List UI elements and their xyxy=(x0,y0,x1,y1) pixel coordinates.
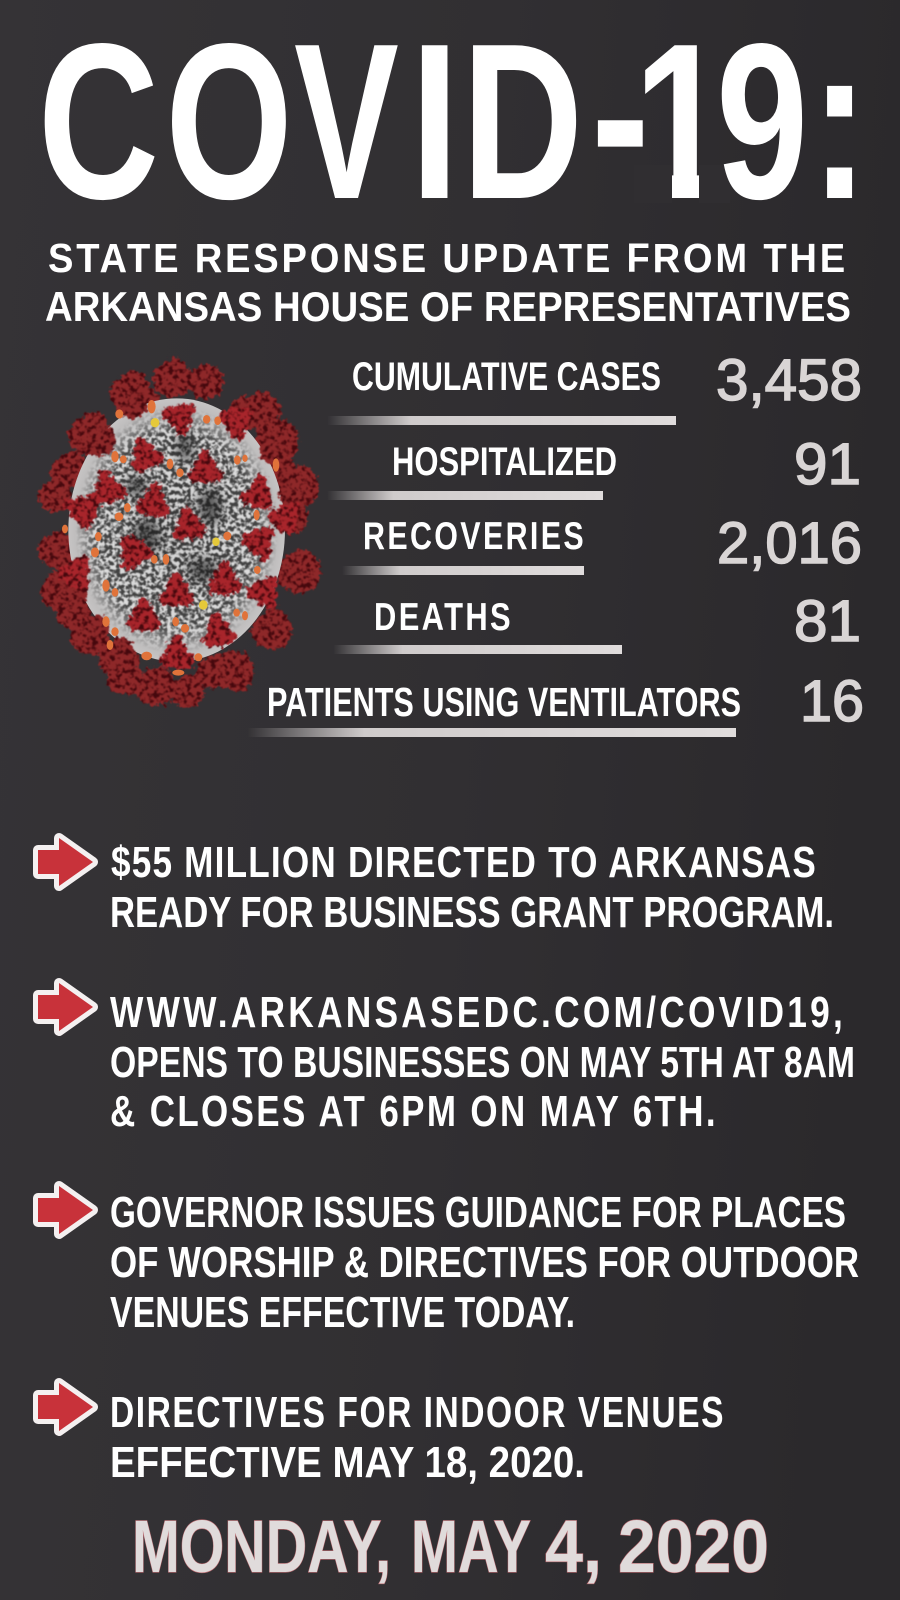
stat: cumulative cases xyxy=(327,348,862,425)
stat: recoveries xyxy=(342,511,862,576)
stat: patients using ventilators: 16 xyxy=(800,669,864,734)
stat: cumulative cases: 3,458 xyxy=(716,348,862,413)
stat: deaths: DEATHS xyxy=(374,596,513,639)
stat: hospitalized xyxy=(327,432,861,500)
title: D xyxy=(462,0,583,245)
date: MONDAY, xyxy=(132,1505,391,1588)
bullet: grant program xyxy=(110,838,834,937)
stat: patients using ventilators xyxy=(247,669,864,737)
title: O xyxy=(165,0,293,246)
title: : xyxy=(810,0,869,245)
icon: arrow 3 xyxy=(38,1186,93,1234)
stat: hospitalized: 91 xyxy=(794,432,861,497)
stat: deaths xyxy=(333,589,861,654)
bullet: worship guidance xyxy=(110,1188,859,1337)
date: 2020 xyxy=(618,1505,769,1588)
title: 1 xyxy=(634,0,729,245)
title: 9 xyxy=(716,0,808,246)
bullet: indoor venues: EFFECTIVE MAY 18, 2020. xyxy=(110,1438,585,1487)
title: C xyxy=(38,0,159,245)
bullet: worship guidance: VENUES EFFECTIVE TODAY. xyxy=(110,1288,575,1337)
bullet: indoor venues: DIRECTIVES FOR INDOOR VENUES xyxy=(110,1388,725,1437)
stat: patients using ventilators: PATIENTS USING VENTILATORS xyxy=(267,679,741,725)
bullet: application website: & CLOSES AT 6PM ON MAY 6TH. xyxy=(110,1087,718,1136)
icon: arrow 2 xyxy=(38,983,93,1031)
stat: cumulative cases: CUMULATIVE CASES xyxy=(352,355,661,399)
bullet: indoor venues xyxy=(110,1388,725,1487)
stat: recoveries: 2,016 xyxy=(717,511,862,576)
bullet: application website xyxy=(110,988,855,1136)
title xyxy=(38,0,869,246)
subtitle: STATE RESPONSE UPDATE FROM THE xyxy=(48,235,848,281)
icon: arrow 1 xyxy=(38,838,93,886)
icon: coronavirus illustration xyxy=(37,358,321,708)
stat: recoveries: RECOVERIES xyxy=(363,515,586,558)
stat: hospitalized: HOSPITALIZED xyxy=(392,440,617,484)
title: V xyxy=(294,0,399,245)
date: 4, xyxy=(545,1505,602,1588)
stat: deaths: 81 xyxy=(794,589,861,654)
icon: arrow 4 xyxy=(38,1383,93,1431)
date xyxy=(132,1505,769,1588)
title: I xyxy=(410,0,459,245)
date: MAY xyxy=(411,1505,531,1588)
subtitle xyxy=(45,235,851,330)
